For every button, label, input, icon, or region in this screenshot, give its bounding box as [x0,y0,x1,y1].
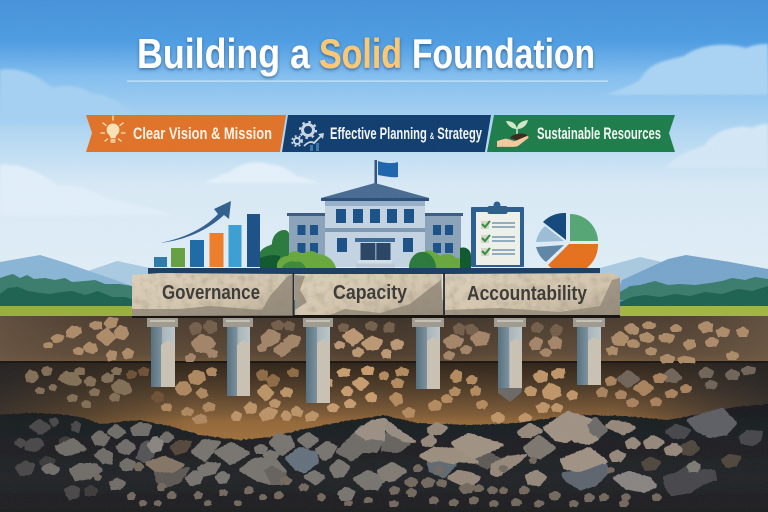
flag [374,160,398,184]
stone label: Capacity [333,282,408,304]
checklist clipboard [471,202,524,267]
icon: gears and arrow [292,122,324,151]
green shrubs [277,247,471,268]
stone label: Accountability [467,283,588,305]
title underline [127,80,608,82]
title: Solid [319,30,402,77]
checklist rows [481,221,515,256]
left wing [287,213,325,267]
banner: effective planning and strategy [282,115,491,152]
stone label: Governance [162,282,260,304]
banner label: Sustainable Resources [537,124,661,143]
shrubs left of building [260,230,290,268]
stone joints [294,273,444,316]
shadow under slab [132,315,620,318]
bedrock layer [0,403,768,512]
pier 6 [573,318,605,385]
banner label: Clear Vision & Mission [133,124,272,143]
clouds [0,44,768,216]
banner label: Effective Planning & Strategy [330,124,482,143]
pie chart [536,213,598,274]
tree line [0,274,768,306]
right wing [425,213,463,267]
grass strips [0,306,768,316]
foundation stone: accountability [445,273,620,315]
arrow [160,201,231,243]
bedrock gravel [95,458,661,506]
bar chart with rising arrow [154,201,260,267]
title: Building a [137,30,311,77]
soil layer: subsoil [0,361,768,442]
icon: seedling in hand [497,120,528,147]
pier 3 [303,318,333,403]
icon: light bulb [101,116,125,143]
title [137,30,595,77]
dark plinth [148,268,600,274]
title: Foundation [412,30,595,77]
distant mountains [0,255,768,292]
sky background [0,0,768,300]
subsoil stones [26,367,755,423]
pier 1 [147,318,178,387]
foundation stone: capacity [295,274,443,315]
foundation piers [147,318,605,403]
soil layer: topsoil [0,316,768,363]
banner: sustainable resources [487,115,675,152]
foundation stone: governance [132,273,293,316]
building [287,160,463,268]
pier 2 [223,318,253,396]
topsoil stones [44,318,748,362]
pier 5 [494,318,526,402]
bedrock rocks [15,409,762,500]
main hall [321,183,429,268]
banner: clear vision and mission [86,115,286,152]
pier 4 [412,318,444,389]
